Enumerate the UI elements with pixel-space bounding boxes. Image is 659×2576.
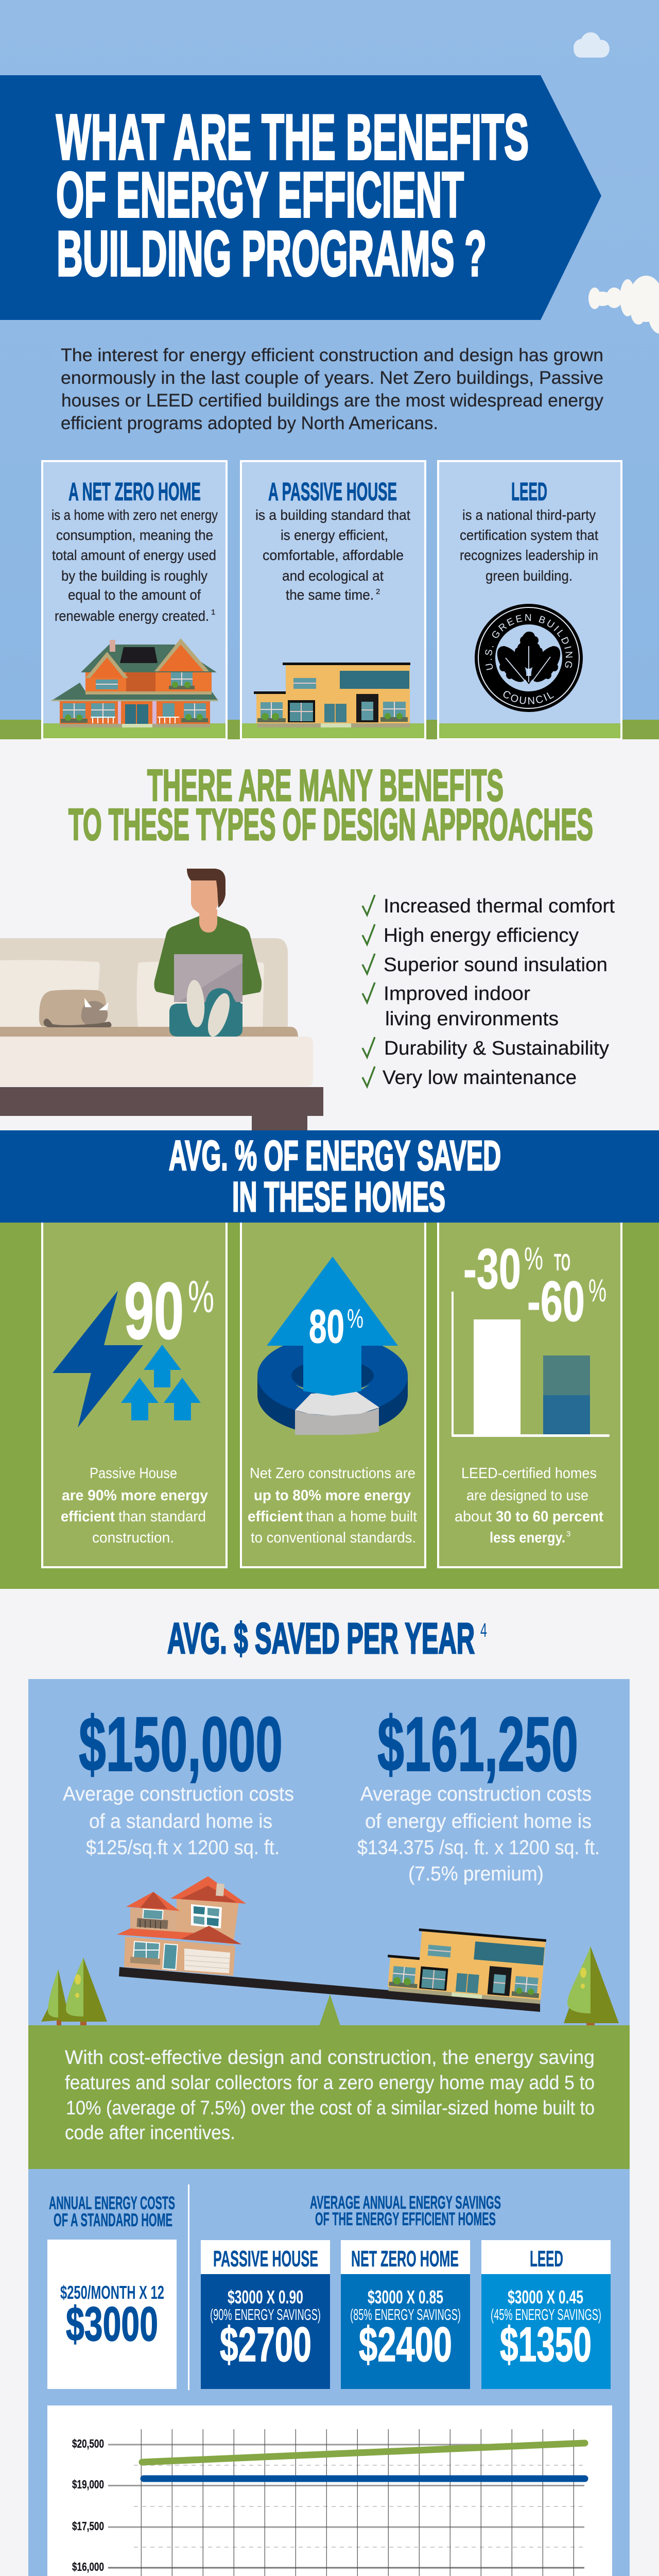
stat: 80%: % bbox=[347, 1304, 363, 1334]
annual energy costs column: ANNUAL ENERGY COSTS bbox=[49, 2193, 175, 2213]
description: efficient bbox=[61, 1509, 115, 1525]
benefits checklist bbox=[362, 895, 615, 1089]
description bbox=[255, 507, 410, 603]
description: Passive House bbox=[90, 1465, 177, 1482]
annual savings heading: AVERAGE ANNUAL ENERGY SAVINGS bbox=[310, 2193, 501, 2213]
intro text: enormously in the last couple of years. Net Zero buildings, Passive bbox=[61, 368, 603, 388]
savings card: leed: LEED bbox=[530, 2246, 563, 2272]
description: about bbox=[455, 1509, 492, 1525]
title banner bbox=[0, 75, 601, 320]
icon: lightning bolt bbox=[53, 1291, 143, 1428]
axis labels: $20,500 bbox=[72, 2437, 104, 2450]
savings card: leed: $3000 X 0.45 bbox=[508, 2286, 583, 2308]
intro text: The interest for energy efficient construction and design has grown bbox=[61, 345, 603, 365]
description: recognizes leadership in bbox=[460, 547, 598, 563]
description: consumption, meaning the bbox=[56, 527, 213, 543]
title bbox=[56, 102, 529, 290]
description: equal to the amount of bbox=[68, 587, 201, 603]
icon: us green building council logo: U.S. GREEN BUILDING bbox=[485, 614, 573, 670]
stat: -30% to -60%: -30 bbox=[463, 1238, 521, 1301]
axis labels: $19,000 bbox=[72, 2478, 104, 2491]
stat: -30% to -60% bbox=[463, 1238, 606, 1333]
list items: High energy efficiency bbox=[384, 925, 579, 946]
stat: -30% to -60%: % bbox=[588, 1273, 606, 1309]
axis labels: $16,000 bbox=[72, 2560, 104, 2573]
description: is a building standard that bbox=[255, 507, 410, 523]
description: 30 to 60 percent bbox=[496, 1509, 603, 1525]
stat: standard home cost: $125/sq.ft x 1200 sq. ft. bbox=[86, 1837, 280, 1859]
description: up to 80% more energy bbox=[254, 1487, 411, 1504]
list items: Improved indoor bbox=[384, 983, 530, 1005]
banner: avg percent of energy saved bbox=[0, 1130, 659, 1223]
stat: energy efficient home cost: of energy efficient home is bbox=[365, 1810, 592, 1833]
panel: cost explanation: code after incentives. bbox=[65, 2122, 235, 2144]
description bbox=[460, 507, 598, 584]
stat: 80%: 80 bbox=[309, 1300, 344, 1353]
stat: 90%: % bbox=[188, 1271, 214, 1322]
icon: us green building council logo bbox=[475, 604, 583, 712]
savings card: net zero home: $2400 bbox=[359, 2317, 452, 2372]
axis labels bbox=[72, 2437, 578, 2576]
icon: right tree bbox=[564, 1946, 619, 2028]
icon: net zero house bbox=[51, 638, 218, 727]
panel: cost explanation: 10% (average of 7.5%) over the cost of a similar-sized home built to bbox=[66, 2097, 595, 2119]
icon: traditional house bbox=[117, 1876, 246, 1976]
savings card: net zero home bbox=[341, 2240, 470, 2389]
description: and ecological at bbox=[282, 568, 384, 584]
icon: small cloud bbox=[574, 32, 610, 58]
hero sky section bbox=[0, 0, 659, 739]
description bbox=[455, 1465, 603, 1546]
green energy saved section bbox=[0, 1223, 659, 1589]
stat: -30% to -60%: % bbox=[524, 1241, 543, 1277]
icon: check marks bbox=[362, 895, 375, 1087]
description: 3 bbox=[566, 1530, 570, 1538]
savings card: leed bbox=[481, 2240, 611, 2389]
annual savings heading: OF THE ENERGY EFFICIENT HOMES bbox=[315, 2209, 496, 2229]
panel: cost explanation bbox=[28, 2025, 630, 2169]
stat: -30% to -60%: TO bbox=[554, 1249, 570, 1276]
icon: tilted modern house bbox=[385, 1926, 546, 2004]
heading: avg dollars saved per year: 4 bbox=[480, 1620, 487, 1641]
description: comfortable, affordable bbox=[263, 547, 404, 563]
description: is a national third-party bbox=[462, 507, 596, 523]
description bbox=[248, 1465, 417, 1546]
list items: Durability & Sustainability bbox=[384, 1038, 609, 1059]
list items: Increased thermal comfort bbox=[384, 895, 615, 917]
description: construction. bbox=[92, 1530, 174, 1546]
description: Net Zero constructions are bbox=[250, 1465, 415, 1482]
description: by the building is roughly bbox=[61, 568, 207, 584]
panel: a net zero home bbox=[42, 461, 227, 738]
axis labels: $17,500 bbox=[72, 2519, 104, 2533]
line chart bbox=[72, 2429, 585, 2576]
panel: cost explanation: features and solar collectors for a zero energy home may add 5 to bbox=[65, 2072, 595, 2094]
annual savings heading bbox=[310, 2193, 501, 2229]
panel: 80 percent net zero bbox=[241, 1216, 425, 1567]
description: LEED-certified homes bbox=[461, 1465, 597, 1482]
description: certification system that bbox=[460, 527, 598, 543]
stat: energy efficient home cost: Average construction costs bbox=[360, 1783, 592, 1805]
icon: up arrows bbox=[121, 1345, 201, 1420]
intro text bbox=[61, 345, 603, 433]
description: less energy. bbox=[490, 1530, 565, 1546]
stat: energy efficient home cost: (7.5% premium) bbox=[408, 1863, 544, 1885]
panel: a passive house bbox=[241, 461, 425, 738]
savings card: passive house: $3000 X 0.90 bbox=[228, 2286, 303, 2308]
description: total amount of energy used bbox=[52, 547, 216, 563]
annual energy costs column: $3000 bbox=[66, 2297, 158, 2351]
savings card: net zero home: NET ZERO HOME bbox=[351, 2246, 459, 2272]
panel: savings section bbox=[28, 1679, 630, 2576]
savings card: net zero home: (85% ENERGY SAVINGS) bbox=[350, 2306, 461, 2324]
description: is a home with zero net energy bbox=[51, 507, 218, 523]
description: efficient bbox=[248, 1509, 303, 1525]
savings card: leed: $1350 bbox=[500, 2317, 592, 2372]
illustration: balance scale with two houses and trees bbox=[41, 1876, 619, 2028]
description bbox=[61, 1465, 208, 1546]
man bbox=[154, 869, 262, 1039]
panel: leed bbox=[437, 460, 622, 739]
bar chart bbox=[452, 1292, 610, 1437]
savings card: passive house: (90% ENERGY SAVINGS) bbox=[210, 2306, 321, 2324]
heading: A NET ZERO HOME bbox=[68, 478, 201, 506]
list items: Superior sound insulation bbox=[384, 954, 608, 976]
heading: A PASSIVE HOUSE bbox=[268, 478, 397, 506]
description bbox=[51, 507, 218, 624]
intro text: efficient programs adopted by North Americans. bbox=[61, 413, 438, 433]
list items: Very low maintenance bbox=[383, 1067, 577, 1089]
heading: there are many benefits bbox=[68, 761, 593, 850]
panel: cost explanation: With cost-effective design and construction, the energy saving bbox=[65, 2047, 595, 2069]
icon: large cloud bbox=[588, 276, 659, 334]
cat bbox=[39, 990, 111, 1027]
panel: cost of ownership chart bbox=[47, 2405, 612, 2576]
heading: LEED bbox=[511, 478, 547, 506]
description: 2 bbox=[376, 587, 380, 596]
stat: standard home cost bbox=[63, 1701, 294, 1859]
description: are 90% more energy bbox=[62, 1487, 208, 1504]
annual energy costs column: OF A STANDARD HOME bbox=[54, 2210, 172, 2230]
savings card: net zero home: $3000 X 0.85 bbox=[368, 2286, 443, 2308]
description: to conventional standards. bbox=[251, 1530, 416, 1546]
stat: energy efficient home cost bbox=[357, 1701, 600, 1885]
description: is energy efficient, bbox=[281, 527, 388, 543]
stat: standard home cost: of a standard home is bbox=[89, 1810, 272, 1833]
description: green building. bbox=[485, 568, 573, 584]
list items bbox=[383, 895, 615, 1089]
stat: energy efficient home cost: $134.375 /sq. ft. x 1200 sq. ft. bbox=[357, 1837, 600, 1859]
savings card: passive house bbox=[201, 2240, 330, 2389]
description: than standard bbox=[118, 1509, 206, 1525]
panel: 30 to 60 percent leed bbox=[438, 1216, 621, 1567]
annual energy costs column bbox=[47, 2193, 177, 2389]
intro text: houses or LEED certified buildings are the most widespread energy bbox=[61, 391, 603, 411]
stat: standard home cost: $150,000 bbox=[79, 1701, 283, 1787]
description: renewable energy created. bbox=[55, 608, 209, 624]
stat: -30% to -60%: -60 bbox=[527, 1270, 585, 1333]
icon: donut with up arrow bbox=[257, 1257, 408, 1435]
annual energy costs column: $250/MONTH X 12 bbox=[60, 2282, 164, 2303]
stat: standard home cost: Average construction costs bbox=[63, 1783, 294, 1805]
description: the same time. bbox=[286, 587, 374, 603]
icon: left trees bbox=[41, 1958, 107, 2026]
illustration: man on sofa with laptop and cat bbox=[0, 869, 323, 1130]
icon: passive house bbox=[254, 663, 410, 727]
description: are designed to use bbox=[466, 1487, 588, 1504]
icon: fulcrum bbox=[319, 1994, 340, 2026]
savings card: passive house: $2700 bbox=[220, 2317, 311, 2372]
savings card: passive house: PASSIVE HOUSE bbox=[213, 2246, 318, 2272]
heading: avg dollars saved per year bbox=[167, 1614, 487, 1663]
panel: 90 percent passive house bbox=[42, 1216, 227, 1567]
stat: 90%: 90 bbox=[124, 1266, 184, 1356]
description: than a home built bbox=[306, 1509, 417, 1525]
icon: plank bbox=[119, 1967, 540, 2012]
divider between annual costs and savings bbox=[188, 2184, 189, 2390]
list items: living environments bbox=[385, 1008, 559, 1030]
banner: avg percent of energy saved: IN THESE HOMES bbox=[232, 1174, 445, 1221]
description: 1 bbox=[211, 608, 215, 617]
icon: us green building council logo: COUNCIL bbox=[504, 691, 554, 705]
